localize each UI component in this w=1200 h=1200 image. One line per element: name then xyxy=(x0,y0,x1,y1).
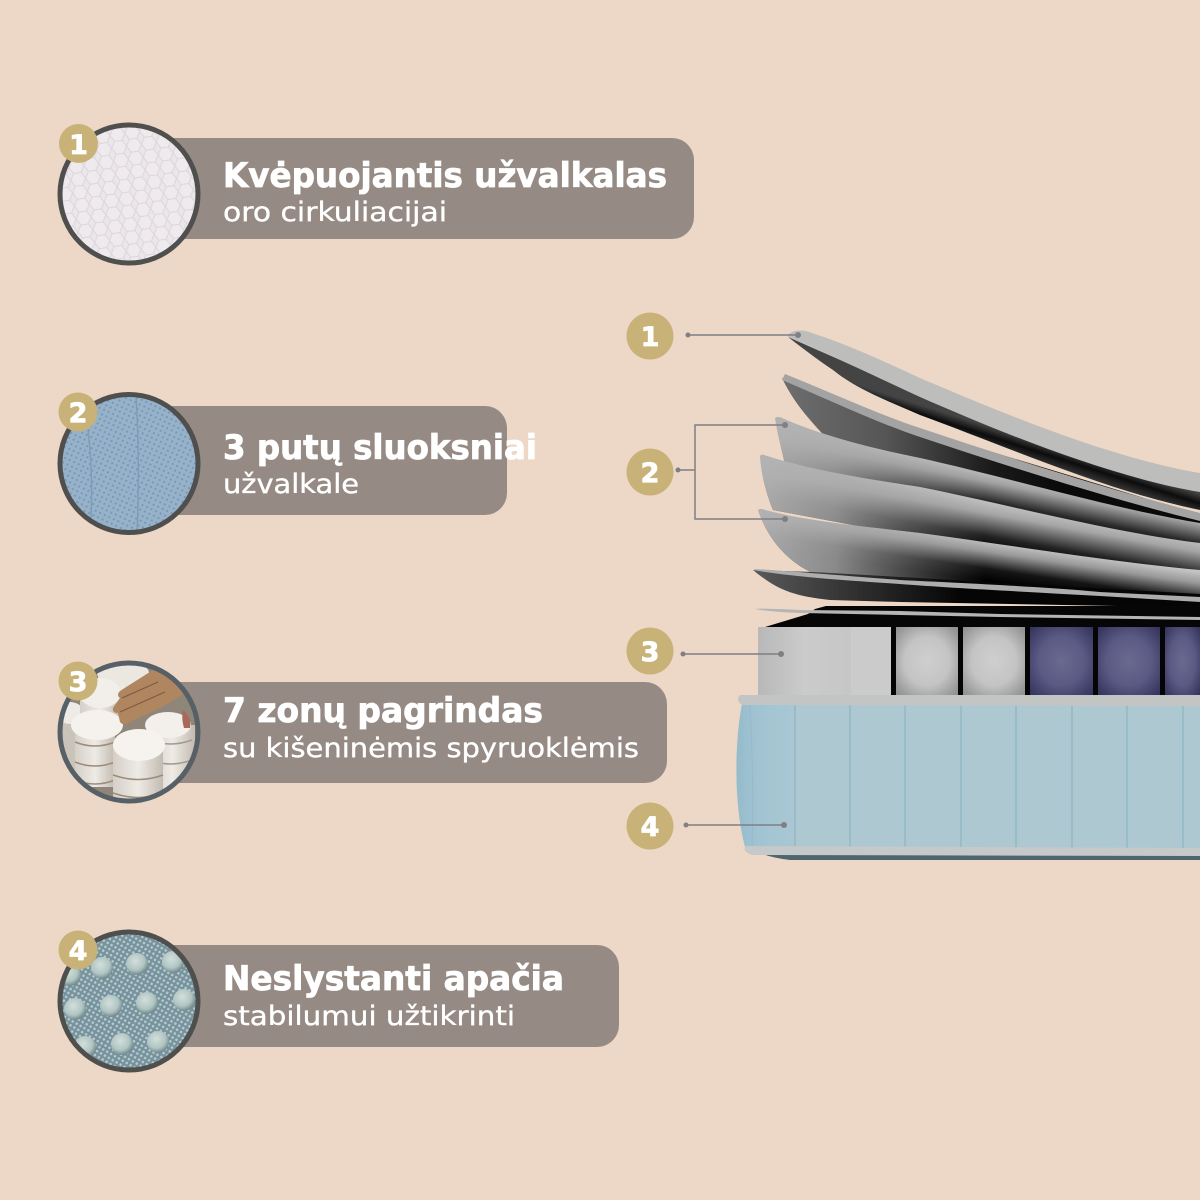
panel: three foam layers xyxy=(58,392,537,535)
layer: foam 1 xyxy=(775,417,1200,548)
subtext 2: užvalkale xyxy=(223,469,359,500)
layer: top cover xyxy=(788,330,1200,510)
mattress cross-section xyxy=(736,330,1200,860)
badge 4 xyxy=(58,930,98,970)
badge 1: 1 xyxy=(69,130,88,161)
panel: non-slip bottom xyxy=(58,930,619,1070)
layer: thin dark foam xyxy=(753,569,1200,606)
panel: breathable cover xyxy=(59,124,694,263)
black base shadow xyxy=(765,606,1200,630)
infographic canvas xyxy=(58,122,1200,1072)
springs xyxy=(758,627,1200,695)
marker 3: 3 xyxy=(641,637,659,668)
bottom dark edge xyxy=(760,853,1200,860)
connector 1 xyxy=(686,332,801,338)
bottom piping xyxy=(744,846,1200,856)
marker 1: 1 xyxy=(641,322,659,353)
badge 2: 2 xyxy=(69,398,87,429)
subtext 4: stabilumui užtikrinti xyxy=(223,1001,515,1032)
heading 2: 3 putų sluoksniai xyxy=(223,428,537,468)
heading 4: Neslystanti apačia xyxy=(223,959,564,999)
marker 2: 2 xyxy=(641,458,659,489)
marker 1 xyxy=(626,312,674,360)
layer: foam 2 xyxy=(760,455,1200,572)
layer: thin light sheet xyxy=(755,609,1200,620)
icon: anti-slip dots texture xyxy=(59,932,198,1070)
marker 4: 4 xyxy=(641,812,659,843)
label pill 1 xyxy=(130,138,694,239)
badge 1 xyxy=(59,124,98,163)
top piping xyxy=(738,695,1200,706)
icon: quilted cover texture xyxy=(60,125,198,263)
marker 4 xyxy=(626,802,674,850)
badge 2 xyxy=(58,392,98,432)
connector 3 xyxy=(680,651,784,657)
blue side panel xyxy=(736,704,1200,850)
heading 1: Kvėpuojantis užvalkalas xyxy=(223,156,667,196)
icon: blue mesh texture xyxy=(60,394,198,535)
icon: pocket springs photo xyxy=(56,660,200,805)
badge 3 xyxy=(58,662,98,700)
connector 4 xyxy=(684,822,787,828)
panel: seven-zone base xyxy=(56,660,667,805)
label pill 2 xyxy=(130,406,507,515)
subtext 1: oro cirkuliacijai xyxy=(223,197,447,228)
label pill 4 xyxy=(130,945,619,1047)
badge 4: 4 xyxy=(69,936,87,967)
connector 2 xyxy=(676,422,788,522)
subtext 3: su kišeninėmis spyruoklėmis xyxy=(223,733,639,764)
layer: textured foam xyxy=(782,374,1200,540)
heading 3: 7 zonų pagrindas xyxy=(223,691,543,731)
badge 3: 3 xyxy=(69,667,87,698)
marker 2 xyxy=(626,448,674,496)
layer: foam 3 xyxy=(758,509,1200,600)
label pill 3 xyxy=(130,682,667,783)
marker 3 xyxy=(626,628,674,674)
